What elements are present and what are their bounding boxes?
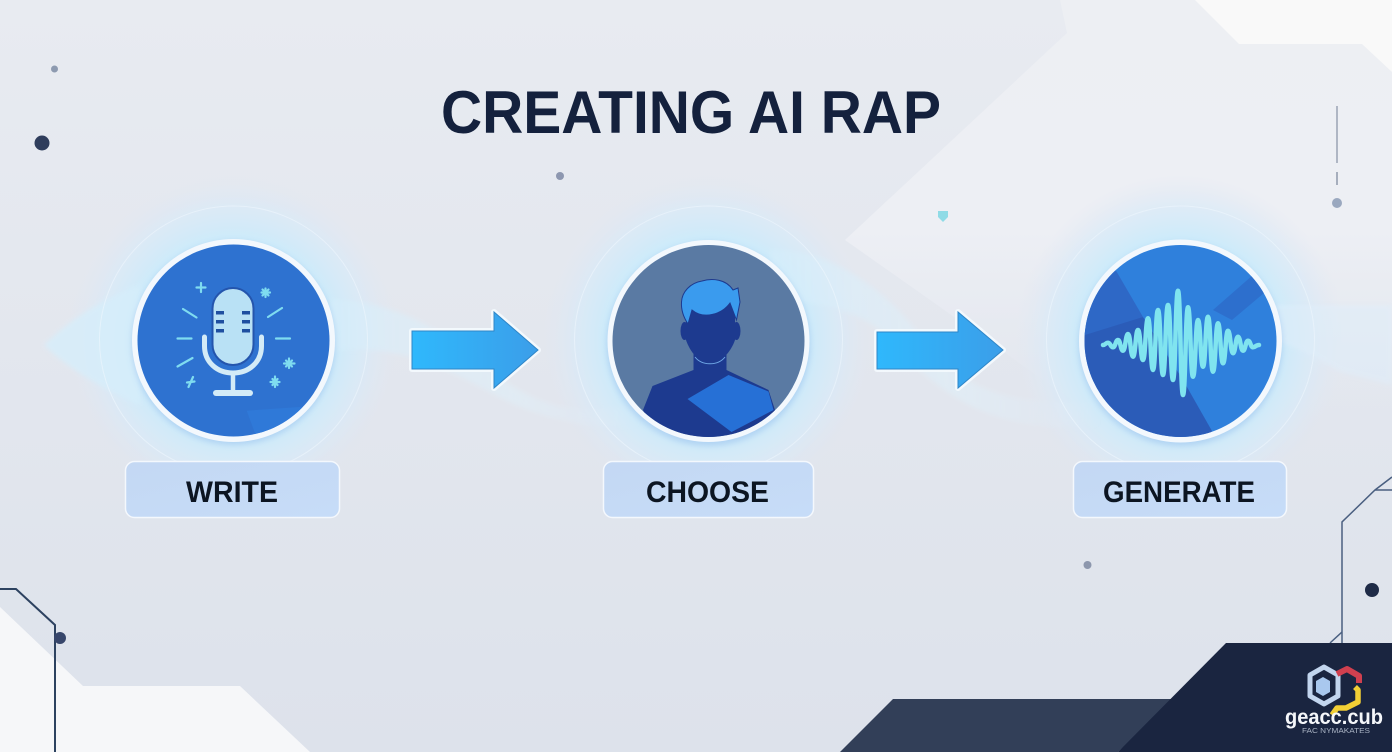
- label: choose: [604, 462, 814, 518]
- logo mark: [1310, 667, 1359, 715]
- label: write: [126, 462, 340, 518]
- label: choose: CHOOSE: [646, 476, 769, 509]
- icon: sound waveform: [1103, 291, 1259, 395]
- step 3: generate: [1046, 206, 1314, 474]
- decorative line and dot: top right: [1332, 106, 1342, 208]
- logo: [1285, 667, 1383, 735]
- outer ring 3: [1046, 206, 1314, 474]
- bottom-right dark panels: [840, 643, 1392, 752]
- arrow 2: [877, 312, 1003, 388]
- logo tagline: FAC NYMAKATES: [1302, 728, 1370, 735]
- background: white top-right corner: [1195, 0, 1392, 72]
- circle badge 2: [606, 240, 810, 446]
- glow behind circles and flow ribbons: [44, 175, 1392, 505]
- arrow 1: [412, 312, 538, 388]
- circuit line: bottom left: [0, 589, 66, 752]
- outer ring 1: [100, 206, 368, 474]
- title: CREATING AI RAP: [441, 79, 941, 146]
- step 1: write: [100, 206, 368, 474]
- background: white bottom-left facet: [0, 607, 310, 752]
- step 2: choose: [574, 206, 842, 474]
- decorative dots: top left: [34, 66, 58, 150]
- label: write: WRITE: [186, 476, 278, 509]
- icon: microphone: [178, 283, 294, 396]
- label: generate: GENERATE: [1103, 476, 1255, 509]
- logo wordmark: geacc.cub: [1285, 706, 1383, 729]
- icon: sound rays and sparkles: [178, 283, 294, 387]
- circle badge 1: [132, 239, 336, 445]
- circuit line: bottom right: [1330, 477, 1392, 643]
- decorative dot: center: [556, 172, 564, 180]
- decorative teal shield: [938, 211, 948, 222]
- decorative dot: lower right: [1084, 561, 1092, 569]
- label: generate: [1074, 462, 1286, 518]
- background: light upper-right facet: [845, 0, 1392, 420]
- icon: person silhouette: [643, 280, 775, 450]
- outer ring 2: [574, 206, 842, 474]
- circle badge 3: [1060, 240, 1282, 450]
